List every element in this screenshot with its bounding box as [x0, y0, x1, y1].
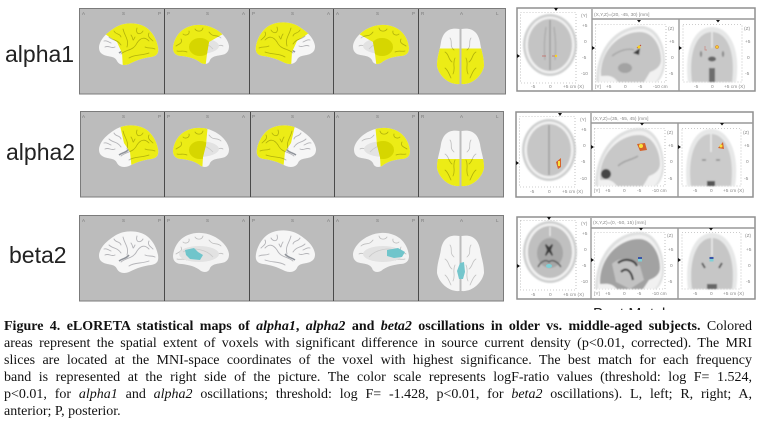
MRI labels alpha2: [Y] — [594, 188, 600, 194]
panel: alpha2 cortical surface maps: P — [167, 114, 170, 119]
MRI labels beta2: (Z) — [745, 233, 752, 239]
marker triangles alpha1 — [517, 8, 720, 58]
panel: alpha2 cortical surface maps: A — [460, 114, 463, 119]
MRI sagittal slice beta2 — [595, 232, 664, 289]
panel: alpha1 cortical surface maps: P — [167, 11, 170, 16]
panel: beta2 cortical surface maps: A — [242, 218, 245, 223]
MRI labels alpha2: -10 — [580, 176, 587, 182]
MRI labels alpha1: +5 — [582, 23, 588, 29]
MRI labels beta2: 0 — [748, 263, 751, 269]
MRI labels alpha1: 0 — [711, 84, 714, 90]
MRI labels alpha2: -5 — [581, 159, 586, 165]
MRI labels alpha2: 0 — [548, 189, 551, 195]
panel: beta2 cortical surface maps: A — [327, 218, 330, 223]
panel: alpha1 cortical surface maps: R — [421, 11, 425, 16]
MRI labels alpha1: (Z) — [744, 26, 751, 32]
panel: alpha2 cortical surface maps — [80, 112, 504, 197]
MRI labels alpha1: +5 cm (X) — [563, 84, 584, 90]
brain: medial right view alpha1 — [353, 25, 409, 64]
MRI labels beta2: -5 — [693, 291, 698, 297]
MRI labels alpha1: (X,Y,Z)=(20, -45, 30) [mm] — [594, 12, 650, 18]
MRI labels beta2: -5 — [637, 291, 642, 297]
MRI labels alpha2: 0 — [583, 143, 586, 149]
MRI labels alpha2: -5 — [744, 176, 749, 182]
MRI labels alpha1: -10 — [581, 71, 588, 77]
activation blob sagittal alpha1 — [637, 45, 641, 48]
MRI coronal slice alpha1 — [687, 27, 737, 82]
MRI labels alpha1: +5 — [669, 39, 675, 45]
MRI sagittal slice alpha1 — [596, 26, 665, 82]
MRI labels alpha1: -5 — [669, 71, 674, 77]
brain: lateral right view beta2 — [256, 230, 315, 272]
caption text block: areas represent the spatial extent of voxels with significant difference in source current density (p<0.01, corrected). The MRI — [4, 336, 752, 351]
MRI labels alpha2: -5 — [693, 188, 698, 194]
MRI labels alpha1: 0 — [671, 55, 674, 61]
MRI coronal slice alpha2 — [686, 129, 736, 186]
heading: Best Match (cut off by caption): Best Match — [593, 306, 671, 323]
MRI labels beta2: -5 — [668, 279, 673, 285]
MRI labels beta2: +5 cm (X) — [563, 292, 584, 298]
panel: beta2 cortical surface maps: P — [252, 218, 255, 223]
panel: alpha1 cortical surface maps: A — [242, 11, 245, 16]
MRI labels alpha2: -5 — [668, 176, 673, 182]
MRI labels alpha2: 0 — [623, 188, 626, 194]
panel: beta2 cortical surface maps: L — [496, 218, 499, 223]
MRI labels beta2: 0 — [670, 263, 673, 269]
MRI labels alpha1: (Y) — [581, 13, 588, 19]
panel: alpha1 cortical surface maps: L — [496, 11, 499, 16]
MRI labels alpha1: -5 — [638, 84, 643, 90]
brain: lateral right view alpha2 — [257, 125, 316, 167]
MRI coronal slice beta2 — [687, 233, 737, 289]
brain: lateral left view beta2 — [99, 231, 158, 273]
MRI labels beta2: +5 — [746, 247, 752, 253]
MRI labels alpha1: (Z) — [668, 26, 675, 32]
MRI labels alpha2: (X,Y,Z)=(35, -55, 45) [mm] — [593, 116, 648, 122]
MRI labels alpha2: (Y) — [580, 117, 587, 123]
brain: medial right view alpha2 — [354, 128, 410, 167]
panel: alpha2 cortical surface maps: P — [412, 114, 415, 119]
panel: alpha2 cortical surface maps: A — [336, 114, 339, 119]
MRI labels alpha1 — [531, 12, 751, 90]
MRI axial slice beta2 — [523, 221, 577, 283]
panel: beta2 cortical surface maps: A — [336, 218, 339, 223]
caption text block — [0, 310, 769, 421]
panel: beta2 MRI slices best match — [517, 217, 755, 299]
panel: beta2 cortical surface maps: S — [122, 218, 125, 223]
marker triangles beta2 — [517, 217, 713, 268]
panel: alpha2 MRI slices best match — [516, 112, 753, 197]
brain: medial view beta2 with cyan region — [173, 233, 229, 272]
brain: lateral right view alpha1 — [256, 22, 315, 64]
brain: lateral left view alpha1 — [99, 23, 158, 65]
panel: alpha1 cortical surface maps: P — [252, 11, 255, 16]
brain: medial view alpha2 — [173, 128, 229, 167]
MRI labels alpha2: 0 — [670, 159, 673, 165]
panel: beta2 cortical surface maps: R — [421, 218, 425, 223]
panel: beta2 cortical surface maps: P — [412, 218, 415, 223]
MRI labels alpha2: 0 — [746, 159, 749, 165]
activation blob axial alpha2 — [556, 158, 561, 169]
caption text block: slices are located at the MNI-space coordinates of the voxel with highest significance. The best match for each frequency — [4, 353, 752, 368]
brain: medial right view beta2 with cyan region — [353, 233, 409, 272]
activation blob sagittal alpha2 — [637, 143, 647, 151]
panel: alpha2 cortical surface maps: S — [122, 114, 125, 119]
MRI labels alpha1: +5 — [606, 84, 612, 90]
activation blob axial alpha1 — [542, 55, 557, 57]
activation blob coronal alpha2 — [718, 142, 724, 149]
panel: beta2 cortical surface maps: A — [82, 218, 85, 223]
panel: alpha2 cortical surface maps: R — [421, 114, 425, 119]
panel: alpha2 cortical surface maps: P — [158, 114, 161, 119]
MRI labels beta2: -10 — [581, 279, 588, 285]
panel: alpha2 cortical surface maps: A — [242, 114, 245, 119]
MRI labels alpha2 — [530, 116, 750, 195]
MRI labels alpha1: [Y] — [595, 84, 601, 90]
MRI axial slice alpha1 — [523, 14, 577, 76]
brain: lateral left view alpha2 — [99, 125, 158, 167]
MRI labels alpha2: +5 — [605, 188, 611, 194]
panel: alpha2 cortical surface maps: S — [206, 114, 209, 119]
MRI labels alpha2: +5 cm (X) — [723, 188, 744, 194]
MRI labels alpha2: -5 — [530, 189, 535, 195]
panel: beta2 cortical surface maps: P — [158, 218, 161, 223]
MRI labels beta2: 0 — [584, 247, 587, 253]
MRI labels alpha1: -10 cm — [653, 84, 668, 90]
activation blob sagittal beta2 — [638, 257, 642, 262]
panel: alpha1 cortical surface maps: P — [158, 11, 161, 16]
MRI labels beta2: 0 — [623, 291, 626, 297]
caption text block: anterior; P, posterior. — [4, 404, 121, 419]
activation blob coronal beta2 — [710, 257, 714, 262]
MRI labels alpha2: -5 — [637, 188, 642, 194]
MRI labels alpha1: -5 — [582, 55, 587, 61]
MRI labels beta2: 0 — [549, 292, 552, 298]
MRI labels alpha1: +5 cm (X) — [724, 84, 745, 90]
panel: beta2 cortical surface maps: A — [460, 218, 463, 223]
panel: alpha2 cortical surface maps: A — [82, 114, 85, 119]
panel: alpha1 cortical surface maps: A — [336, 11, 339, 16]
MRI labels alpha1: +5 — [745, 39, 751, 45]
panel: beta2 cortical surface maps: S — [291, 218, 294, 223]
MRI labels beta2: +5 — [582, 231, 588, 237]
MRI labels beta2: +5 — [605, 291, 611, 297]
panel: alpha1 cortical surface maps: S — [206, 11, 209, 16]
MRI labels beta2: (X,Y,Z)=(0, -50, 15) [mm] — [593, 220, 646, 226]
MRI labels beta2: -10 cm — [652, 291, 667, 297]
MRI labels alpha1: -5 — [745, 71, 750, 77]
activation blob axial beta2 — [546, 264, 552, 268]
MRI labels alpha1: -5 — [694, 84, 699, 90]
MRI labels beta2: (Z) — [667, 233, 674, 239]
panel: alpha1 cortical surface maps: A — [82, 11, 85, 16]
MRI labels alpha2: +5 — [744, 143, 750, 149]
MRI labels alpha2: -10 cm — [652, 188, 667, 194]
caption text block: band is represented at the right side of the picture. The color scale represents logF-ratio values (threshold: log F= 1.524, — [4, 370, 752, 385]
panel: alpha2 cortical surface maps: S — [376, 114, 379, 119]
row label: alpha2: alpha2 — [6, 139, 75, 165]
panel: alpha2 cortical surface maps: S — [291, 114, 294, 119]
panel: alpha2 cortical surface maps: P — [252, 114, 255, 119]
MRI labels alpha1: -5 — [531, 84, 536, 90]
MRI labels beta2 — [531, 220, 752, 298]
MRI sagittal slice alpha2 — [595, 128, 664, 186]
panel: alpha1 MRI slices best match — [517, 8, 755, 91]
MRI labels beta2: -5 — [582, 263, 587, 269]
panel: alpha2 cortical surface maps: A — [327, 114, 330, 119]
MRI labels beta2: (Y) — [581, 221, 588, 227]
panel: beta2 cortical surface maps — [80, 216, 504, 301]
panel: alpha1 cortical surface maps — [80, 8, 506, 94]
MRI labels beta2: -5 — [746, 279, 751, 285]
MRI labels beta2: +5 — [668, 247, 674, 253]
MRI labels beta2: 0 — [710, 291, 713, 297]
MRI labels alpha2: +5 — [581, 127, 587, 133]
MRI labels alpha2: +5 — [668, 143, 674, 149]
MRI labels beta2: [Y] — [594, 291, 600, 297]
brain: top view alpha2 — [437, 131, 484, 186]
MRI labels beta2: -5 — [531, 292, 536, 298]
MRI labels alpha2: (Z) — [743, 130, 750, 136]
marker triangles alpha2 — [516, 113, 724, 165]
MRI labels alpha2: +5 cm (X) — [562, 189, 583, 195]
panel: alpha1 cortical surface maps: A — [460, 11, 463, 16]
caption text block: Figure 4. eLORETA statistical maps of alpha1, alpha2 and beta2 oscillations in older vs. middle-aged subjects. Colored — [4, 319, 752, 334]
MRI labels alpha2: (Z) — [667, 130, 674, 136]
panel: alpha1 cortical surface maps: S — [291, 11, 294, 16]
MRI labels alpha1: 0 — [747, 55, 750, 61]
MRI labels alpha2: 0 — [710, 188, 713, 194]
panel: beta2 cortical surface maps: S — [376, 218, 379, 223]
panel: alpha1 cortical surface maps: S — [122, 11, 125, 16]
MRI labels alpha1: 0 — [549, 84, 552, 90]
MRI labels alpha1: 0 — [584, 39, 587, 45]
MRI axial slice alpha2 — [522, 119, 576, 181]
brain: top view alpha1 — [437, 29, 484, 84]
panel: alpha1 cortical surface maps: P — [412, 11, 415, 16]
panel: beta2 cortical surface maps: P — [167, 218, 170, 223]
MRI labels alpha1: 0 — [624, 84, 627, 90]
row label: beta2: beta2 — [9, 242, 67, 268]
row label: alpha1: alpha1 — [5, 41, 74, 67]
panel: alpha1 cortical surface maps: S — [376, 11, 379, 16]
panel: alpha2 cortical surface maps: L — [496, 114, 499, 119]
panel: beta2 cortical surface maps: S — [206, 218, 209, 223]
brain: medial view alpha1 — [173, 25, 229, 64]
activation blob coronal alpha1 — [705, 45, 719, 50]
caption text block: p<0.01, for alpha1 and alpha2 oscillations; threshold: log F= -1.428, p<0.01, for beta2 oscillations). L, left; R, right; A, — [4, 387, 752, 402]
brain: top view beta2 with cyan region — [437, 236, 484, 291]
panel: alpha1 cortical surface maps: A — [327, 11, 330, 16]
MRI labels beta2: +5 cm (X) — [723, 291, 744, 297]
